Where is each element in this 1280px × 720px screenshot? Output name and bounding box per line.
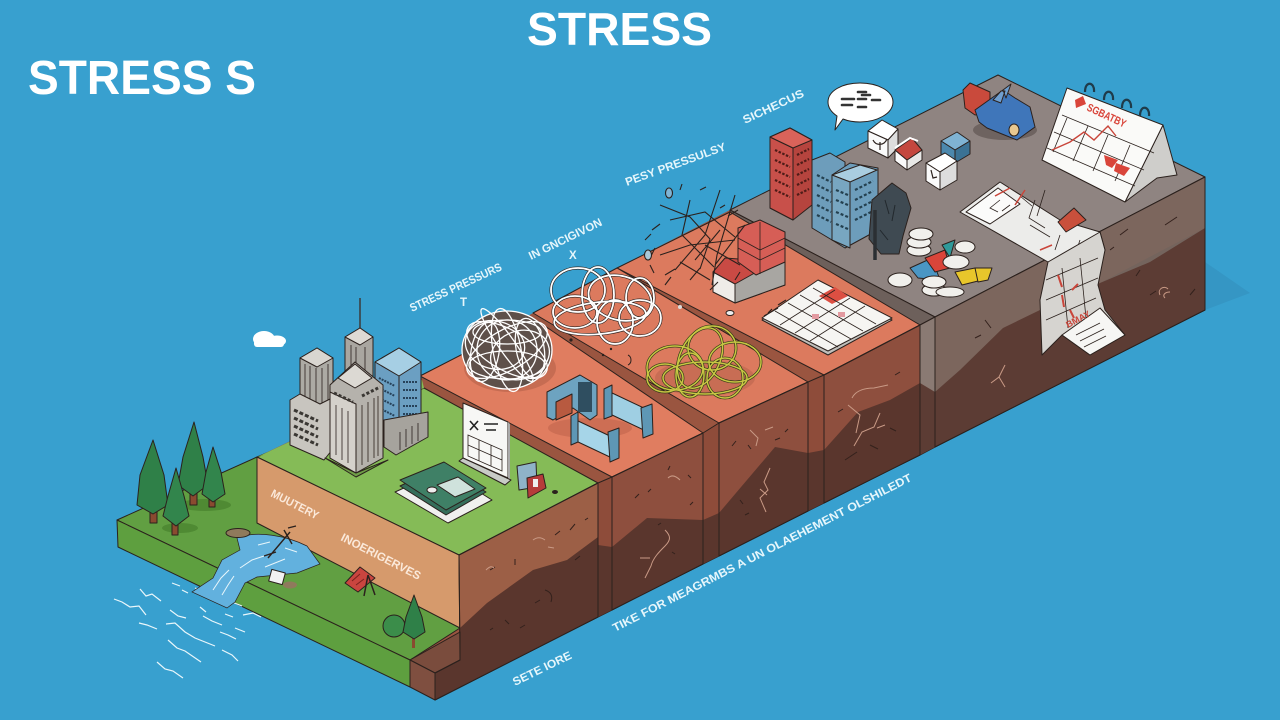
title: STRESS (527, 3, 712, 55)
building: blue towers (812, 153, 878, 248)
panel: grey top layer block (730, 75, 1205, 455)
calendar: flat on salmon (762, 280, 892, 355)
car icon (963, 83, 1037, 140)
book stack (395, 462, 492, 523)
gate: back left (547, 375, 597, 420)
text: marker x: X (569, 250, 577, 262)
waves (114, 583, 261, 678)
panel: salmon block two (420, 318, 703, 617)
poster board (459, 403, 511, 485)
river (192, 526, 320, 608)
sign icon (345, 567, 375, 596)
panel: grass base and green block (117, 380, 598, 700)
text: wall label one: MUUTERY (269, 488, 321, 522)
building: center tower (325, 362, 388, 477)
scattered black lines (644, 184, 745, 290)
building: red tower (770, 128, 812, 220)
tangle: grey wire ball (458, 304, 556, 394)
debris specks (569, 305, 734, 365)
paper strip draping (960, 182, 1125, 355)
paper strip draping: BMAY (1064, 309, 1092, 330)
panel: salmon block four (617, 212, 920, 511)
tangle: yellow green wire (647, 321, 761, 398)
text: marker t: T (460, 297, 467, 309)
gate: front (571, 412, 619, 462)
building: back spire (345, 298, 373, 385)
rock and pole (869, 183, 911, 260)
text: in gncigivon label: IN GNCIGIVON (527, 217, 604, 263)
text: sete iore label: SETE IORE (511, 650, 574, 689)
text: wall label two: INOERIGERVES (339, 532, 423, 583)
buildings: city cluster (290, 298, 428, 477)
cube: white two (926, 153, 957, 190)
text: sichecus label: SICHECUS (741, 88, 806, 127)
gadget icon (517, 462, 558, 498)
text: stress pressures label: STRESS PRESSURS (408, 261, 504, 315)
trees (137, 422, 231, 535)
speech bubble (828, 83, 893, 130)
calendar: standing desk: SGBATBY (1085, 102, 1128, 131)
gate blocks (547, 375, 653, 462)
building: red and white block (713, 220, 785, 303)
heading: stress s: STRESS S (28, 52, 256, 105)
cube icons (868, 120, 970, 190)
cube: open box (895, 138, 922, 170)
cube: white one (868, 120, 898, 158)
building: left tower (290, 348, 333, 460)
calendar: standing desk (1042, 84, 1177, 202)
cube: blue (941, 132, 970, 163)
panel: salmon block three (533, 268, 808, 564)
small tree and bush (383, 595, 425, 648)
cloud icon (253, 331, 286, 347)
building: blue tower (375, 348, 428, 455)
tangle: white loops (551, 267, 661, 344)
coin and chip pile (888, 228, 992, 297)
landmass backing (117, 75, 1205, 700)
gate: right (604, 385, 653, 438)
text: long base caption: TIKE FOR MEAGRMBS A UN OLAEHEMENT OLSHILEDT (611, 472, 914, 635)
text: pesy pressulsy label: PESY PRESSULSY (624, 141, 728, 189)
